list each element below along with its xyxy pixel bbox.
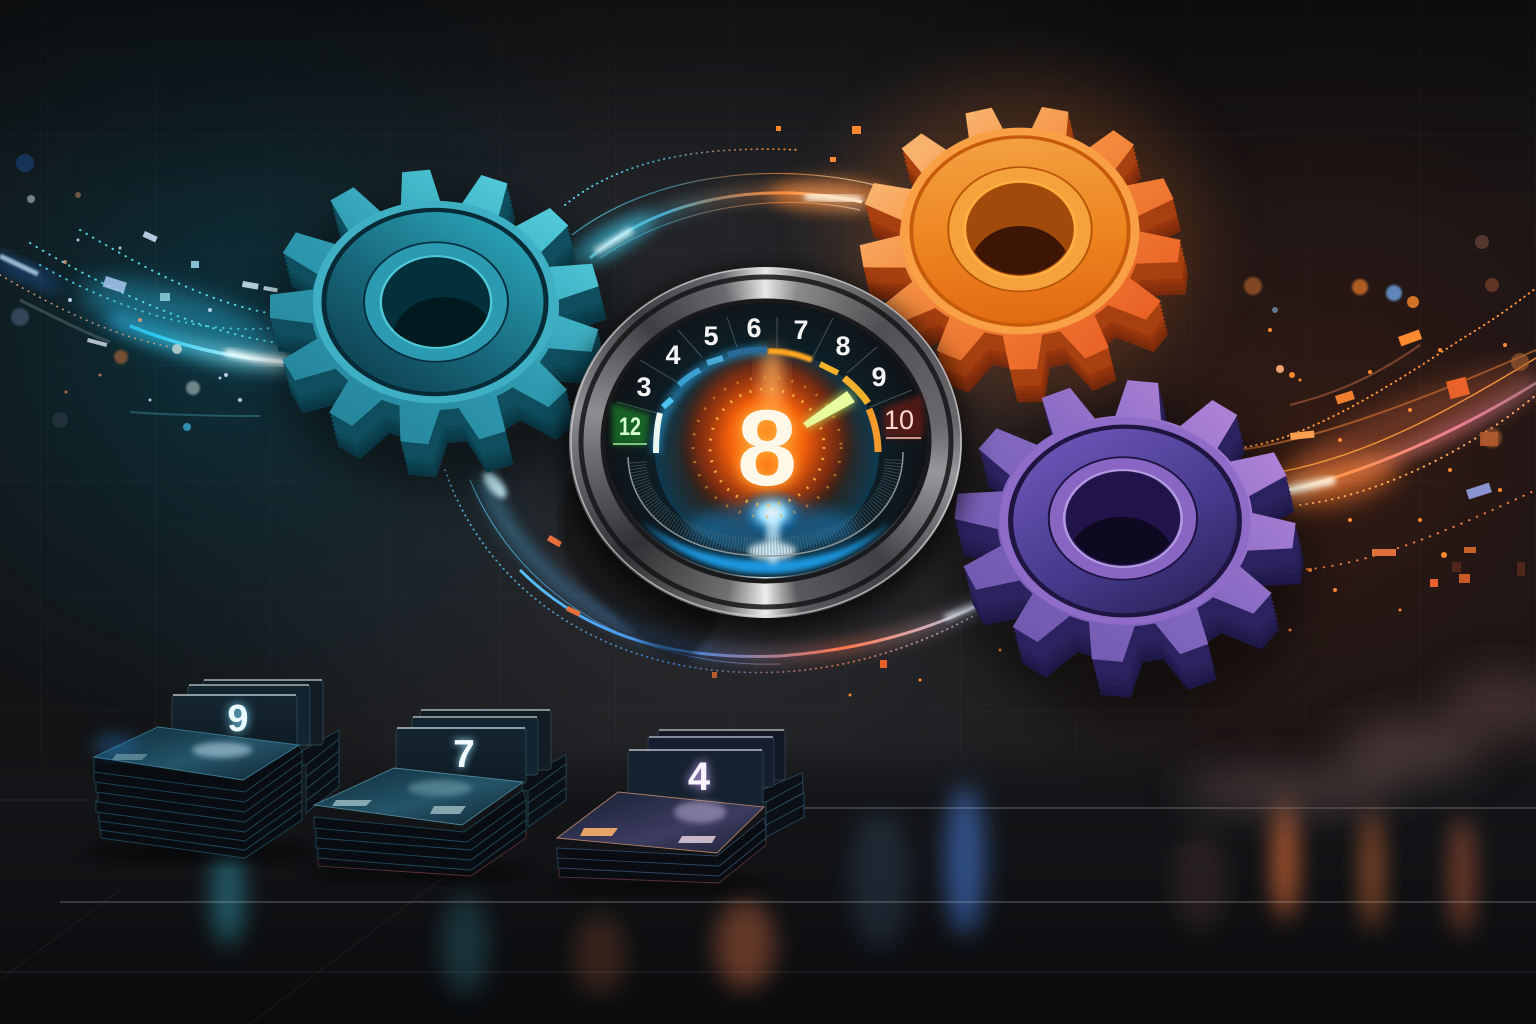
dial numbers: 9 — [871, 362, 887, 392]
number 7: 7 — [453, 733, 475, 776]
blue glow 9 — [93, 735, 137, 755]
back pile 9 — [300, 730, 339, 813]
dial numbers: 4 — [665, 340, 681, 370]
dark base behind dial — [560, 470, 720, 660]
teal gear shadow — [270, 190, 620, 490]
tick lines — [617, 317, 912, 413]
teal gear face — [270, 170, 599, 444]
needle — [803, 391, 855, 428]
dial glass — [605, 303, 927, 577]
hatched inner scale — [628, 452, 903, 556]
big number 8: 8 — [737, 387, 797, 508]
vertical light ray — [766, 505, 780, 565]
scale arc glow — [656, 350, 767, 453]
purple gear extrusion — [939, 371, 1320, 711]
upright cards 7 — [396, 710, 551, 784]
purple gear face — [954, 380, 1296, 662]
orange ray — [762, 347, 782, 423]
smoke — [1180, 671, 1536, 810]
blue lower glow — [687, 504, 857, 552]
label chips 7 — [332, 800, 466, 814]
reflection shadow 4 — [550, 880, 770, 892]
orange gear face — [860, 106, 1181, 370]
dial: gauge — [571, 268, 961, 616]
box 10: 10 — [884, 405, 914, 435]
blue crescent at lower glass edge — [640, 520, 893, 574]
light streak: left — [0, 230, 309, 416]
floor — [0, 740, 1536, 1024]
box 12 — [612, 403, 650, 445]
teal hub — [363, 241, 509, 363]
light streak: top arc between gears — [559, 149, 890, 276]
upright cards 9 — [172, 680, 323, 750]
light streak: lower arc around dial — [445, 468, 982, 673]
dial numbers: 3 — [636, 372, 652, 402]
number 4: 4 — [688, 755, 711, 799]
card stack: 4 — [550, 730, 804, 892]
card glare 4 — [674, 801, 726, 823]
bottom white highlight — [748, 542, 796, 560]
card glare 9 — [192, 742, 252, 758]
teal gear extrusion — [252, 159, 627, 492]
orange dot rings — [693, 377, 841, 517]
gear: orange — [824, 80, 1225, 432]
top card 7 — [314, 768, 523, 825]
flat pile 9 — [94, 745, 302, 858]
orange hub — [947, 166, 1093, 292]
upright cards 4 — [628, 730, 785, 810]
card stack: 9 — [85, 680, 339, 860]
back pile 4 — [762, 773, 804, 837]
label chips 4 — [580, 828, 716, 843]
inner disc — [655, 350, 879, 554]
gear: purple — [939, 371, 1320, 715]
dial numbers — [636, 313, 887, 402]
top card 9 — [94, 727, 299, 780]
card stack: 7 — [310, 710, 566, 879]
reflection shadow 9 — [85, 844, 315, 860]
dial metal bezel — [569, 267, 962, 618]
core glow — [677, 346, 857, 530]
box 10 — [883, 395, 924, 438]
purple hub — [1048, 456, 1198, 580]
dial numbers: 7 — [793, 315, 809, 345]
scale arc segments — [656, 350, 878, 453]
flat pile 4 — [557, 818, 766, 883]
dial numbers: 8 — [835, 331, 851, 361]
dial numbers: 6 — [746, 313, 762, 343]
top card 4 — [557, 792, 764, 853]
card glare 7 — [408, 780, 472, 796]
light streak: right — [1240, 288, 1536, 570]
purple gear shadow — [950, 405, 1310, 715]
label chip 9 — [112, 754, 148, 760]
number 9: 9 — [227, 698, 249, 740]
gear: teal — [252, 159, 627, 492]
particles — [11, 126, 1529, 696]
floor reflections — [212, 785, 1474, 995]
flat pile 7 — [314, 790, 526, 876]
box 12: 12 — [619, 413, 641, 441]
lower white highlight — [738, 487, 806, 539]
orange gear glow — [840, 80, 1200, 400]
back pile 7 — [522, 755, 566, 827]
reflection shadow 7 — [310, 865, 530, 879]
dial numbers: 5 — [703, 321, 719, 351]
orange gear extrusion — [824, 80, 1225, 432]
bezel rims — [571, 268, 961, 616]
